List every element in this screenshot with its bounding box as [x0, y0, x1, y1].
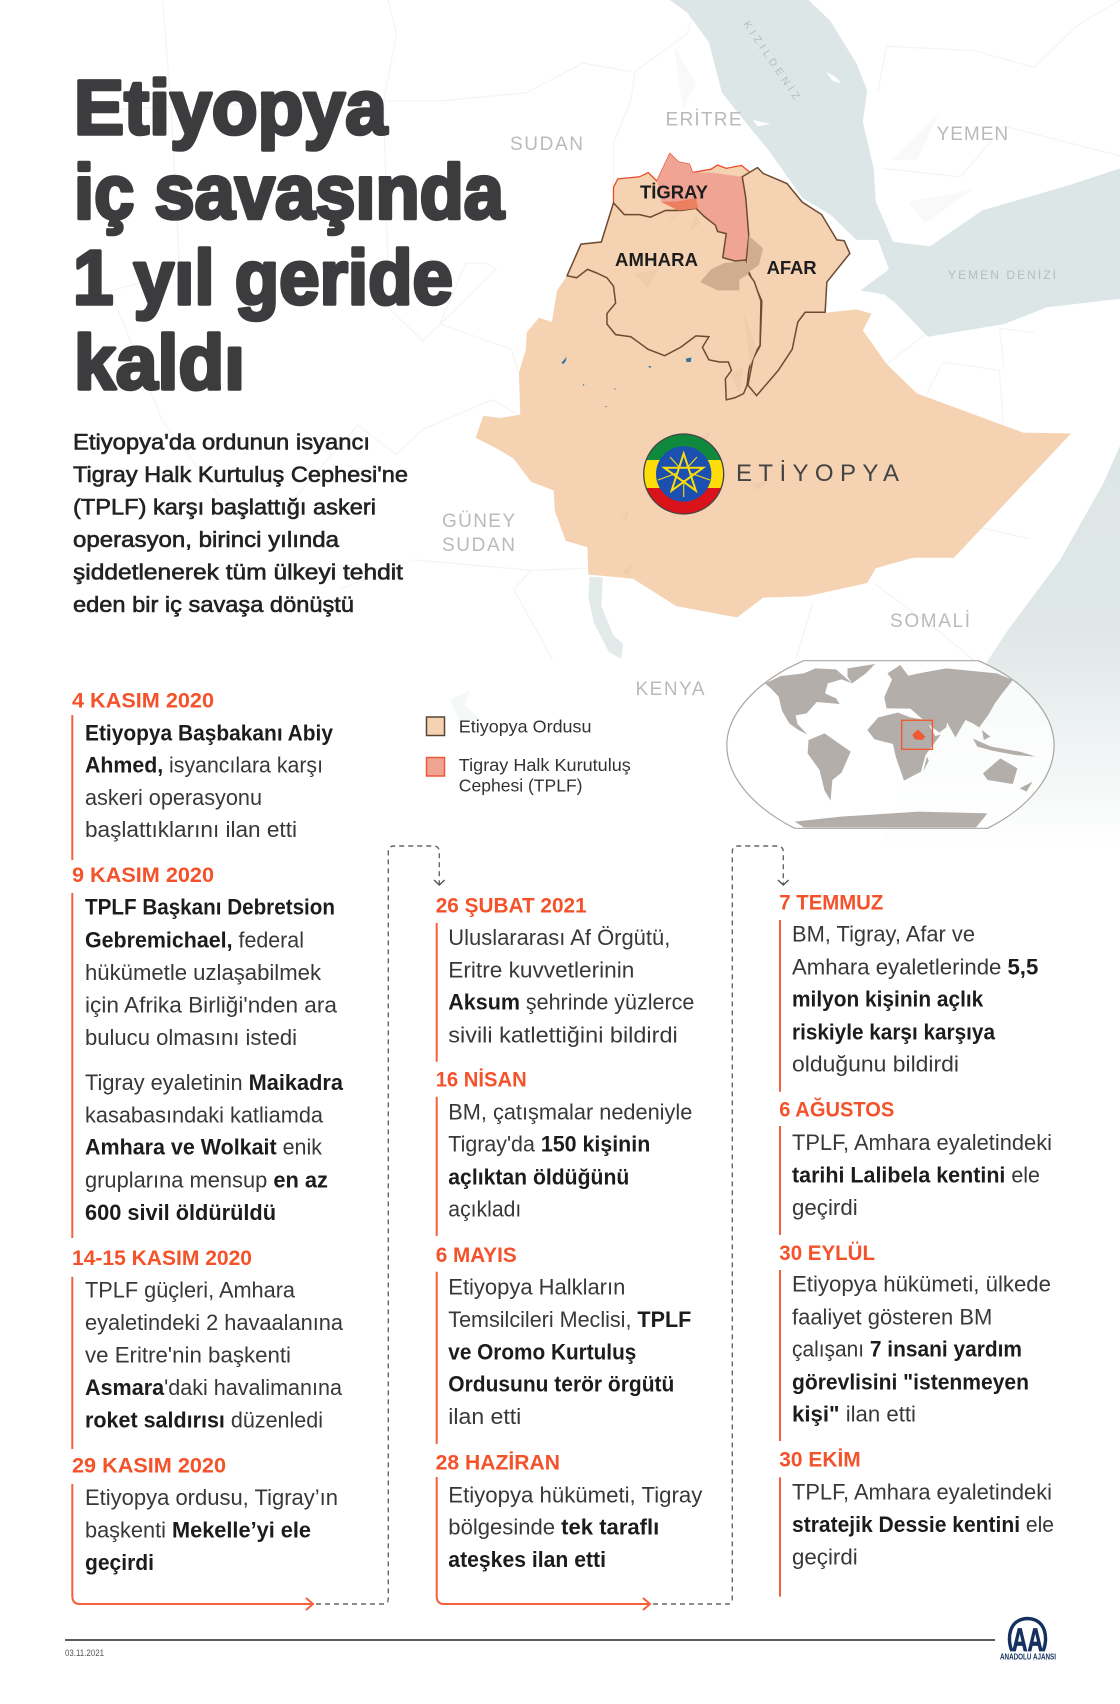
map labels: countries and seas: KENYA — [636, 679, 705, 700]
event: 30 Eylül: Etiyopya hükümeti, ülkede — [792, 1272, 1051, 1297]
map labels: countries and seas: SOMALİ — [890, 611, 970, 632]
event: 9 Kasım 2020: gruplarına mensup en az — [85, 1168, 328, 1193]
title: iç savaşında — [74, 150, 505, 236]
title: kaldı — [74, 320, 245, 406]
event: 30 Eylül: görevlisini "istenmeyen — [792, 1369, 1029, 1394]
event: 9 Kasım 2020: 9 KASIM 2020 — [72, 864, 214, 887]
map labels: countries and seas: YEMEN DENİZİ — [948, 268, 1056, 282]
islands — [753, 72, 841, 126]
event: 29 Kasım 2020: 29 KASIM 2020 — [72, 1454, 226, 1477]
legend: TPLF — [426, 755, 631, 796]
map labels: countries and seas: KIZILDENİZ — [741, 18, 803, 102]
legend: TPLF: Cephesi (TPLF) — [459, 776, 582, 796]
event: 7 Temmuz: BM, Tigray, Afar ve — [792, 922, 975, 947]
title — [73, 65, 505, 406]
event: 7 Temmuz: milyon kişinin açlık — [792, 987, 984, 1012]
event: 9 Kasım 2020: 600 sivil öldürüldü — [85, 1200, 276, 1225]
event: 4 Kasım 2020: askeri operasyonu — [85, 785, 262, 810]
title: 1 yıl geride — [73, 235, 453, 321]
terrain patches — [700, 236, 763, 290]
event: 7 Temmuz: Amhara eyaletlerinde 5,5 — [792, 954, 1038, 979]
event: 6 Mayıs: Temsilcileri Meclisi, TPLF — [448, 1307, 691, 1332]
region: Amhara — [567, 203, 761, 400]
lake: Turkana — [588, 577, 623, 659]
event: 4 Kasım 2020 — [72, 689, 334, 860]
sea: Red Sea and Gulf of Aden — [670, 0, 1120, 337]
event: 30 Eylül — [779, 1242, 1051, 1441]
region: western Tigray — [613, 154, 751, 261]
intro text: Etiyopya'da ordunun isyancı — [73, 430, 370, 454]
event: 9 Kasım 2020: için Afrika Birliği'nden ara — [85, 992, 338, 1017]
event: 16 Nisan: Tigray'da 150 kişinin — [448, 1132, 650, 1157]
event: 16 Nisan: açıkladı — [448, 1197, 521, 1222]
map labels: countries and seas: SUDAN — [442, 535, 515, 556]
event: 28 Haziran: 28 HAZİRAN — [436, 1451, 560, 1474]
event: 14-15 Kasım 2020: roket saldırısı düzenledi — [85, 1407, 323, 1432]
event: 29 Kasım 2020: başkenti Mekelle’yi ele — [85, 1517, 311, 1542]
map labels: countries and seas — [442, 18, 1056, 700]
lake: Kenya north — [450, 690, 480, 722]
event: 7 Temmuz: 7 TEMMUZ — [779, 891, 883, 914]
event: 30 Ekim: 30 EKİM — [779, 1449, 861, 1472]
event: 28 Haziran — [436, 1451, 702, 1572]
event: 9 Kasım 2020: bulucu olmasını istedi — [85, 1025, 297, 1050]
event: 30 Ekim: TPLF, Amhara eyaletindeki — [792, 1479, 1052, 1504]
event: 28 Haziran: bölgesinde tek taraflı — [448, 1515, 659, 1540]
logo: Anadolu Ajansı: ANADOLU AJANSI — [1000, 1652, 1056, 1662]
region: Tigray TPLF — [657, 154, 749, 261]
event: 9 Kasım 2020 — [72, 864, 344, 1238]
map labels: regions — [615, 182, 817, 278]
map labels: regions: AFAR — [767, 257, 817, 278]
event: 4 Kasım 2020: başlattıklarını ilan etti — [85, 817, 297, 842]
intro text: şiddetlenerek tüm ülkeyi tehdit — [73, 560, 403, 584]
event: 26 Şubat 2021: Uluslararası Af Örgütü, — [448, 925, 670, 950]
event: 29 Kasım 2020: geçirdi — [85, 1550, 154, 1575]
event: 4 Kasım 2020: Etiyopya Başbakanı Abiy — [85, 720, 334, 745]
logo: Anadolu Ajansı: AA — [1012, 1622, 1043, 1658]
event: 9 Kasım 2020: TPLF Başkanı Debretsion — [85, 895, 335, 920]
legend: TPLF: Tigray Halk Kurutuluş — [459, 755, 631, 775]
event: 26 Şubat 2021 — [436, 894, 694, 1062]
event: 6 Mayıs: 6 MAYIS — [436, 1244, 517, 1267]
locator highlight — [902, 720, 932, 749]
map labels: countries and seas: SUDAN — [510, 134, 583, 155]
timeline column 1 — [72, 689, 344, 1575]
connector: column 1 to 2 — [72, 846, 445, 1610]
intro text: (TPLF) karşı başlattığı askeri — [73, 494, 376, 520]
event: 6 Mayıs: Etiyopya Halkların — [448, 1274, 625, 1299]
event: 6 Ağustos: tarihi Lalibela kentini ele — [792, 1162, 1040, 1187]
event: 28 Haziran: Etiyopya hükümeti, Tigray — [448, 1482, 702, 1507]
connector: column 2 to 3 — [437, 846, 789, 1610]
event: 9 Kasım 2020: Amhara ve Wolkait enik — [85, 1135, 323, 1160]
intro text — [73, 430, 408, 617]
event: 30 Ekim: stratejik Dessie kentini ele — [792, 1512, 1054, 1537]
map labels: regions: TİGRAY — [640, 182, 709, 203]
event: 16 Nisan: açlıktan öldüğünü — [448, 1164, 629, 1189]
event: 30 Eylül: 30 EYLÜL — [779, 1242, 875, 1265]
event: 14-15 Kasım 2020: eyaletindeki 2 havaalanına — [85, 1310, 344, 1335]
background map: seas and borders — [106, 0, 1120, 850]
event: 7 Temmuz — [779, 891, 1038, 1092]
event: 30 Eylül: faaliyet gösteren BM — [792, 1304, 992, 1329]
country borders — [106, 0, 1120, 660]
region: Afar — [742, 168, 850, 396]
sea: Indian Ocean — [880, 446, 1120, 850]
label: Etiyopya: ETİYOPYA — [736, 460, 899, 487]
event: 26 Şubat 2021: Eritre kuvvetlerinin — [448, 957, 634, 982]
event: 9 Kasım 2020: hükümetle uzlaşabilmek — [85, 960, 322, 985]
event: 14-15 Kasım 2020 — [72, 1247, 344, 1449]
event: 30 Eylül: çalışanı 7 insani yardım — [792, 1337, 1022, 1362]
event: 6 Ağustos — [779, 1098, 1052, 1235]
timeline column 3 — [779, 891, 1054, 1597]
event: 6 Mayıs: Ordusunu terör örgütü — [448, 1372, 674, 1397]
event: 9 Kasım 2020: Tigray eyaletinin Maikadra — [85, 1070, 344, 1095]
logo: Anadolu Ajansı — [1000, 1618, 1056, 1662]
legend: Ethiopian army: Etiyopya Ordusu — [459, 716, 592, 736]
intro text: eden bir iç savaşa dönüştü — [73, 592, 354, 617]
event: 29 Kasım 2020: Etiyopya ordusu, Tigray’ın — [85, 1485, 338, 1510]
event: 16 Nisan: BM, çatışmalar nedeniyle — [448, 1099, 692, 1124]
lakes — [561, 357, 692, 407]
event: 14-15 Kasım 2020: 14-15 KASIM 2020 — [72, 1247, 252, 1270]
date: 03.11.2021 — [65, 1648, 104, 1658]
event: 16 Nisan — [436, 1069, 692, 1236]
timeline column 2 — [436, 894, 702, 1572]
footer rule — [65, 1639, 995, 1641]
legend — [426, 716, 631, 796]
event: 9 Kasım 2020: Gebremichael, federal — [85, 927, 304, 952]
event: 14-15 Kasım 2020: ve Eritre'nin başkenti — [85, 1342, 291, 1367]
event: 6 Mayıs: ve Oromo Kurtuluş — [448, 1339, 636, 1364]
icon: Ethiopian flag — [643, 433, 724, 515]
event: 6 Ağustos: TPLF, Amhara eyaletindeki — [792, 1130, 1052, 1155]
event: 9 Kasım 2020: kasabasındaki katliamda — [85, 1102, 324, 1127]
event: 6 Mayıs: ilan etti — [448, 1404, 521, 1429]
event: 6 Ağustos: geçirdi — [792, 1195, 858, 1220]
map: Ethiopia with regions — [476, 154, 1071, 617]
event: 26 Şubat 2021: sivili katlettiğini bildirdi — [448, 1022, 678, 1047]
event: 28 Haziran: ateşkes ilan etti — [448, 1547, 606, 1572]
event: 30 Eylül: kişi" ilan etti — [792, 1402, 916, 1427]
locator world map — [727, 661, 1054, 828]
map labels: countries and seas: ERİTRE — [666, 109, 742, 130]
event: 7 Temmuz: olduğunu bildirdi — [792, 1052, 959, 1077]
title: Etiyopya — [74, 65, 388, 151]
region: Ethiopia territory — [476, 168, 1071, 617]
event: 14-15 Kasım 2020: TPLF güçleri, Amhara — [85, 1278, 296, 1303]
map labels: regions: AMHARA — [615, 249, 698, 270]
intro text: operasyon, birinci yılında — [73, 527, 340, 552]
intro text: Tigray Halk Kurtuluş Cephesi'ne — [73, 462, 408, 487]
map labels: countries and seas: GÜNEY — [442, 511, 515, 532]
event: 4 Kasım 2020: Ahmed, isyancılara karşı — [85, 753, 323, 778]
event: 6 Mayıs — [436, 1244, 691, 1444]
map labels: countries and seas: YEMEN — [937, 124, 1008, 145]
event: 29 Kasım 2020 — [72, 1454, 338, 1575]
event: 14-15 Kasım 2020: Asmara'daki havalimanına — [85, 1375, 343, 1400]
event: 16 Nisan: 16 NİSAN — [436, 1069, 527, 1092]
event: 30 Ekim: geçirdi — [792, 1544, 858, 1569]
event: 6 Ağustos: 6 AĞUSTOS — [779, 1098, 894, 1122]
event: 4 Kasım 2020: 4 KASIM 2020 — [72, 689, 214, 712]
event: 7 Temmuz: riskiyle karşı karşıya — [792, 1019, 996, 1044]
event: 30 Ekim — [779, 1449, 1054, 1597]
event: 26 Şubat 2021: 26 ŞUBAT 2021 — [436, 894, 587, 917]
event: 26 Şubat 2021: Aksum şehrinde yüzlerce — [448, 990, 694, 1015]
